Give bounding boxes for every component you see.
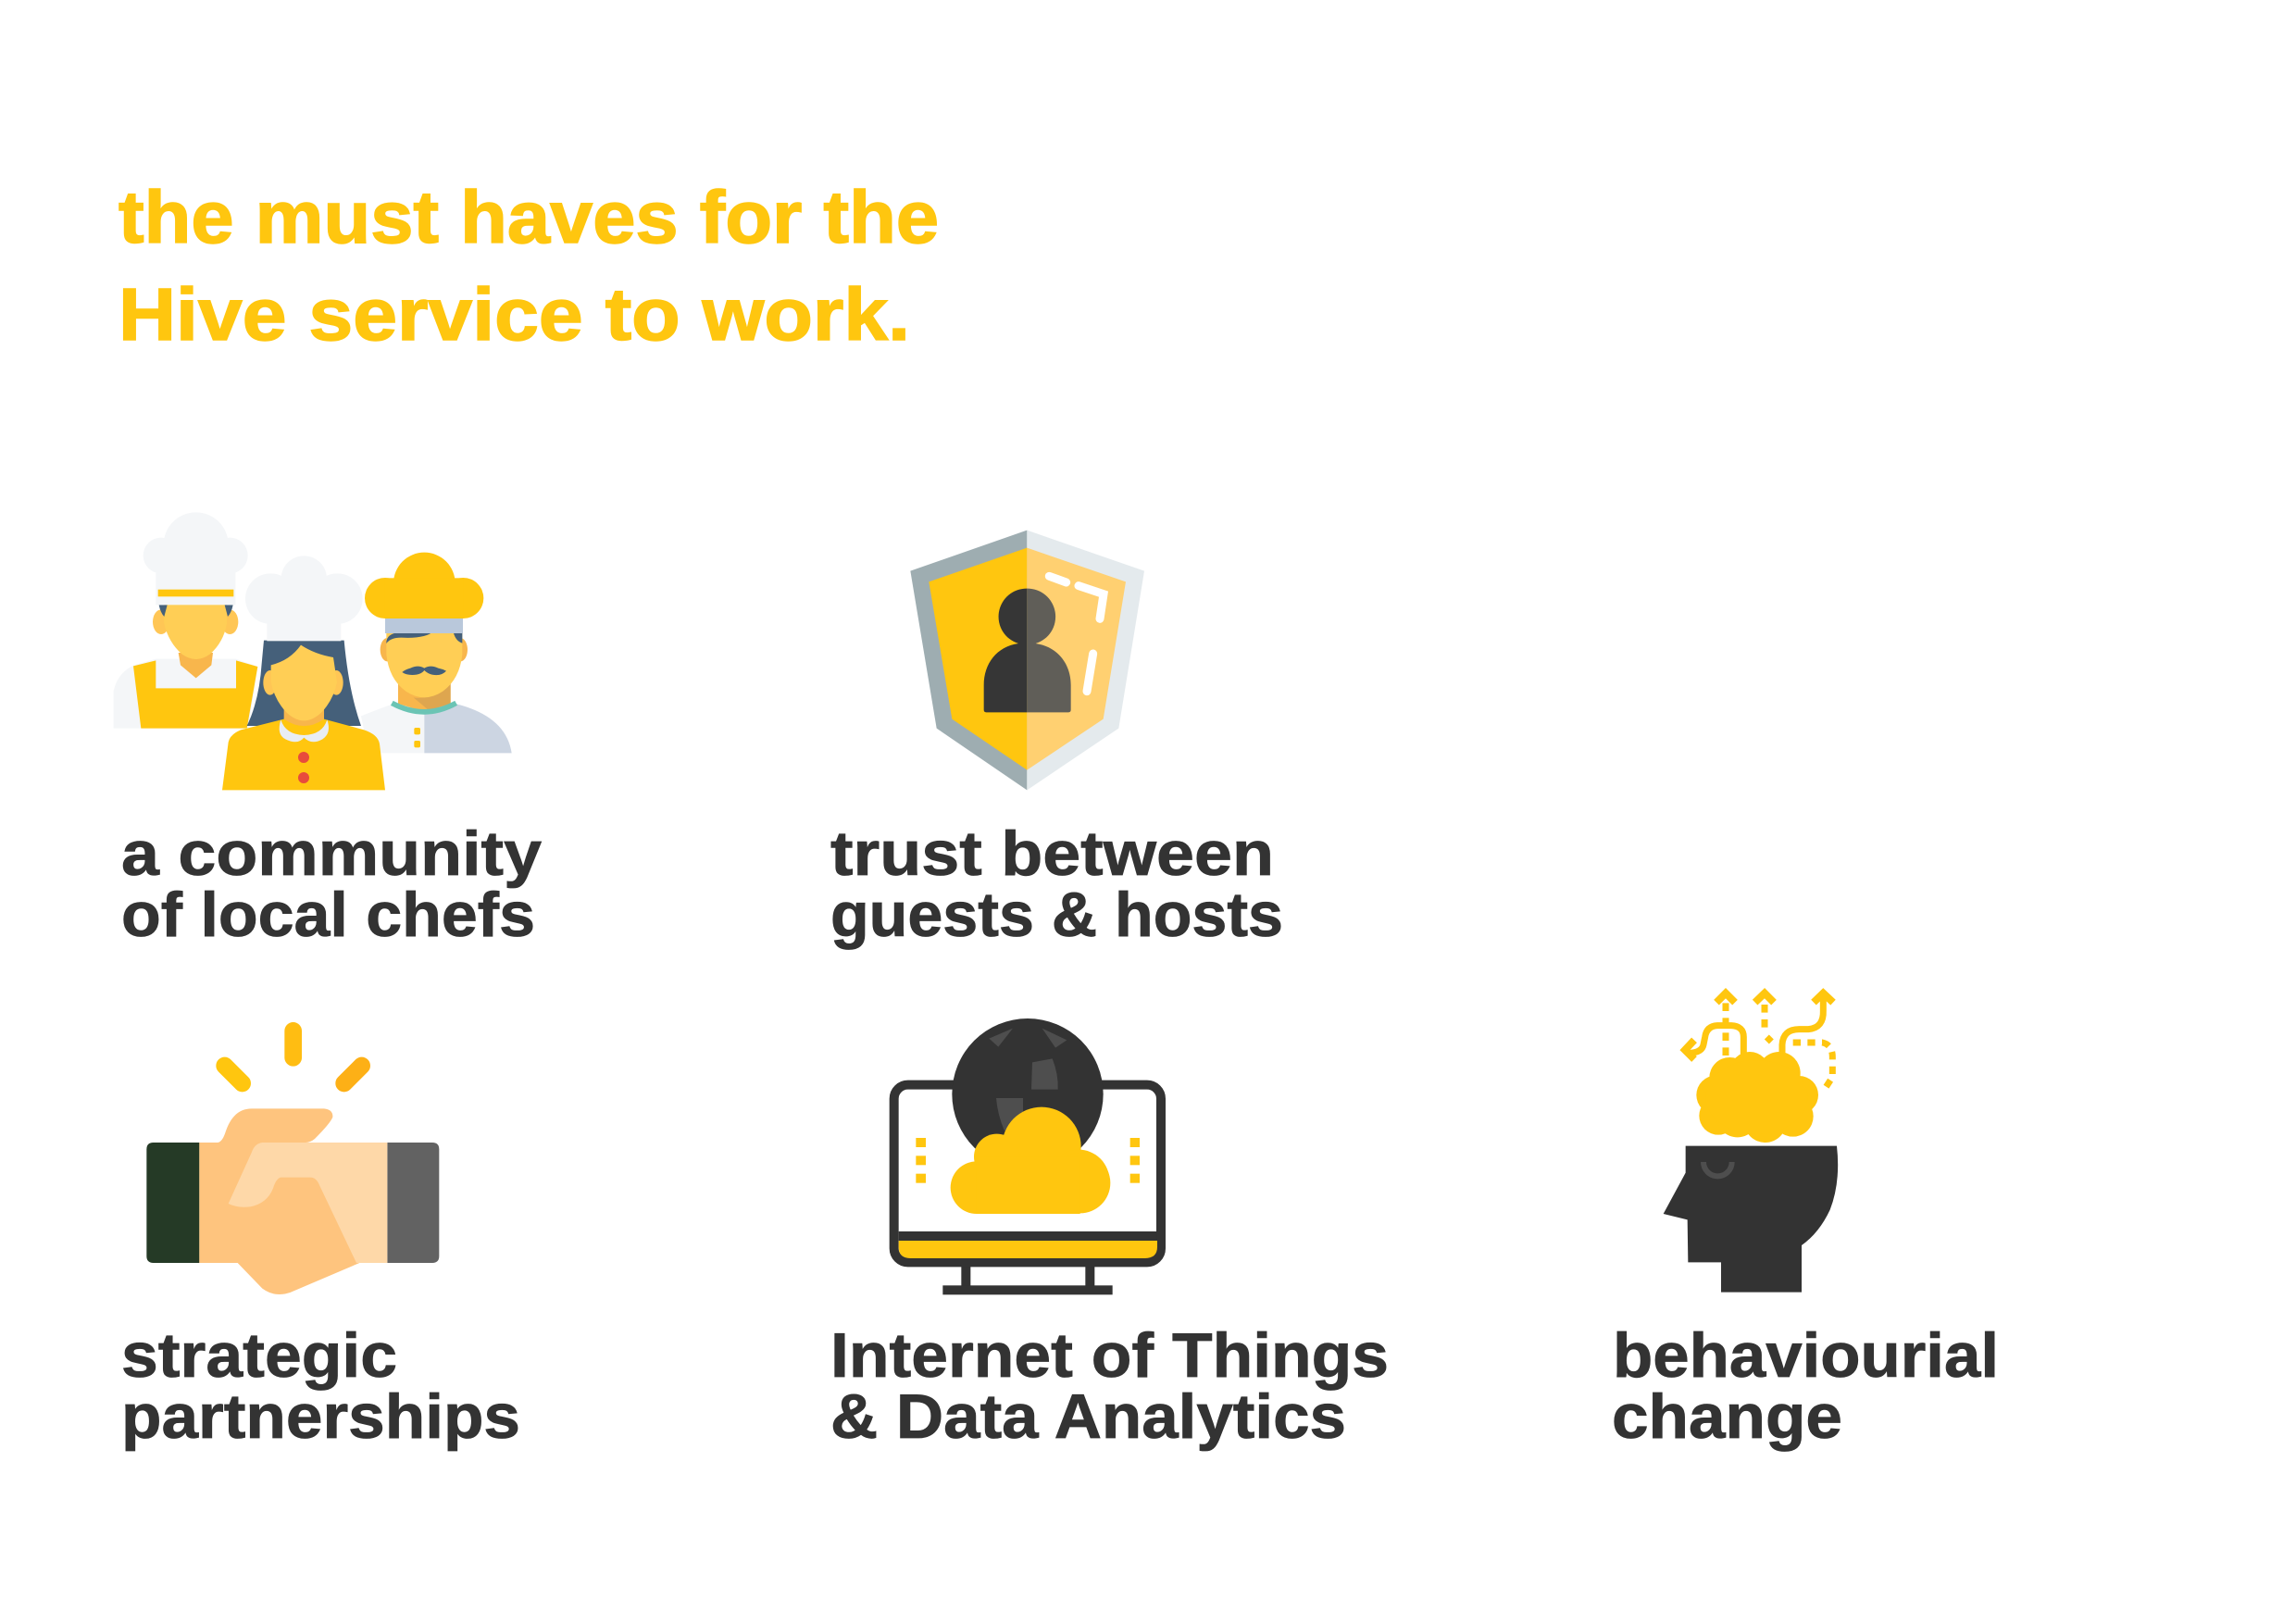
- label: trust between guests and hosts: [830, 818, 1283, 950]
- label: behaviourial change: behaviourial: [1613, 1320, 1999, 1391]
- label: community of local chefs: [121, 818, 542, 950]
- label: strategic partnerships: [121, 1320, 520, 1452]
- label: internet of things and data analytics: Internet of Things: [830, 1320, 1389, 1391]
- title: [119, 176, 939, 356]
- title: the must haves for the: [119, 176, 939, 258]
- label: community of local chefs: of local chefs: [121, 880, 535, 950]
- label: internet of things and data analytics: & Data Analytics: [830, 1381, 1346, 1452]
- label: behaviourial change: change: [1612, 1381, 1842, 1452]
- label: community of local chefs: a community: [121, 818, 542, 889]
- icon: trust shield: [910, 531, 1144, 790]
- label: internet of things and data analytics: [830, 1320, 1389, 1452]
- right chef: [361, 553, 512, 753]
- label: behaviourial change: [1612, 1320, 1999, 1452]
- left chef: [114, 512, 257, 729]
- woman chef: [222, 556, 385, 790]
- label: trust between guests and hosts: guests & hosts: [830, 880, 1283, 950]
- label: strategic partnerships: partnerships: [121, 1381, 520, 1452]
- title: Hive service to work.: [119, 273, 910, 356]
- icon: community of chefs: [114, 512, 512, 790]
- icon: internet of things monitor: [894, 1018, 1161, 1294]
- icon: handshake: [146, 1031, 439, 1294]
- icon: behavioural change head: [1664, 993, 1838, 1293]
- label: trust between guests and hosts: trust between: [830, 818, 1274, 889]
- label: strategic partnerships: strategic: [121, 1320, 397, 1391]
